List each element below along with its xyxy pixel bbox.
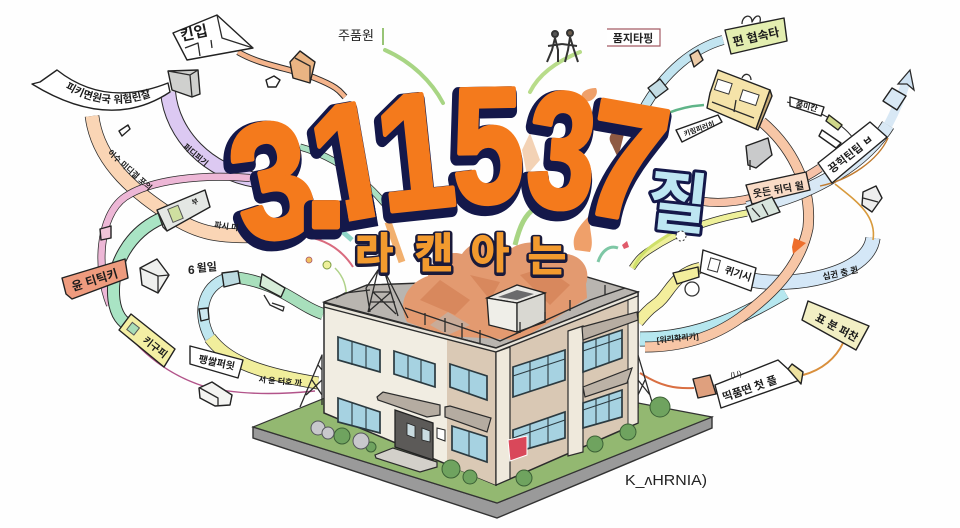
roof railing — [336, 285, 625, 343]
explosion cloud — [403, 240, 587, 340]
door awning — [377, 392, 440, 417]
entrance steps — [375, 448, 437, 472]
top-left banner — [31, 69, 171, 111]
top-left banner: 피키면원국 워험린찰 — [66, 82, 150, 104]
glasses doodle — [264, 295, 284, 311]
radio mast right — [638, 355, 655, 412]
subtitle fill: 라 — [355, 230, 393, 277]
name plate — [437, 428, 445, 441]
red sign — [508, 436, 527, 461]
subtitle — [355, 230, 566, 281]
subtitle outline: 는 — [528, 234, 566, 281]
entrance door — [395, 410, 433, 460]
arrow tag — [883, 88, 906, 110]
plinth — [253, 417, 712, 518]
label: orange ribbon text: 이수 미디결 포의 — [106, 147, 154, 192]
couple figures — [547, 30, 578, 62]
yellow tag label — [119, 314, 175, 367]
end pillar — [628, 296, 638, 427]
notebook panel: 부 — [191, 197, 200, 207]
small dashed banner — [676, 115, 722, 142]
subtitle outline: 아 — [471, 231, 509, 278]
peach parcel icon — [290, 51, 315, 83]
right yellow card — [802, 301, 869, 350]
peach parcel bottom right — [693, 375, 716, 398]
awning upper — [582, 312, 638, 340]
radio mast left — [300, 355, 322, 407]
decimal point: . — [303, 79, 349, 262]
white label — [190, 346, 243, 378]
date text korean: 윌일 — [196, 259, 217, 275]
number fill layer: 1 — [368, 56, 462, 247]
top centre right label: 품지타핑 — [613, 32, 653, 45]
subtitle outline — [355, 231, 566, 281]
subtitle fill: 는 — [528, 233, 566, 280]
box icon grey — [168, 70, 200, 97]
headline number 3.11537 — [223, 86, 672, 252]
bubble dots — [676, 231, 686, 241]
white note label — [700, 250, 756, 291]
right yellow card: 표 분 퍼찬 — [813, 310, 861, 345]
rooftop unit right face — [517, 293, 545, 332]
number fill layer: 1 — [298, 65, 405, 259]
number fill layer: 7 — [571, 66, 680, 259]
top right green tag: 편 협속타 — [731, 24, 781, 49]
number fill layer: 3 — [522, 56, 602, 245]
blue ribbon text: 십귄 충 퀸 — [822, 264, 859, 282]
top centre label: 주품원 — [338, 28, 374, 43]
number shadow layer — [223, 86, 672, 252]
number shadow layer: 1 — [295, 70, 402, 264]
roof deck — [324, 277, 638, 348]
cloud texture — [420, 267, 570, 315]
rooftop unit left face — [487, 298, 517, 332]
rooftop unit — [487, 285, 545, 303]
date text: 6 — [188, 263, 195, 277]
top centre right label — [607, 29, 660, 46]
ribbon network: right side — [632, 40, 914, 388]
bubble icon — [685, 282, 699, 296]
top paper label: 킨입 — [179, 22, 209, 45]
subtitle fill — [355, 230, 566, 280]
number shadow layer: 3 — [212, 89, 327, 284]
top right green tag — [725, 16, 787, 54]
corner pillar — [496, 347, 510, 485]
left wall tan section — [447, 335, 496, 485]
small yellow tag — [673, 267, 699, 284]
small pencil doodle — [119, 125, 130, 136]
cyan ribbon text: [워리학리카] — [656, 331, 699, 345]
parapet — [324, 292, 638, 352]
bottom right banner: (U) — [730, 369, 743, 380]
subtitle outline: 라 — [355, 231, 393, 278]
left wall — [324, 303, 496, 485]
small tag icon — [266, 76, 280, 87]
number fill layer — [230, 86, 670, 242]
label: purple ribbon text: 퍼디피기 — [181, 141, 210, 168]
small pink tag — [100, 226, 111, 240]
window mullions — [352, 335, 622, 456]
awning lower — [583, 368, 632, 397]
ribbon tags — [690, 50, 703, 67]
roof lattice mast — [366, 270, 408, 318]
shrubs — [334, 397, 670, 486]
arrow banner label — [818, 122, 887, 183]
delivery truck icon — [199, 382, 232, 406]
number fill layer: 3 — [215, 84, 330, 279]
window awning — [445, 406, 491, 432]
suitcase panel — [707, 70, 772, 130]
ribbon network: left side — [92, 50, 580, 393]
yellow mini tag — [826, 115, 842, 130]
rocks — [311, 421, 369, 449]
small label top right: 품미칸 — [795, 99, 819, 114]
white note label: 퀴기시 — [723, 263, 753, 284]
red tag label: 윤 티틱키 — [70, 266, 120, 294]
red tag label — [62, 259, 128, 299]
top paper label — [173, 15, 253, 60]
bottom watermark text: K_ʌHRNIA) — [625, 473, 707, 489]
arrow banner label: 끙힉틴팁 ㅂ — [825, 132, 876, 176]
number shadow layer: 3 — [519, 61, 599, 250]
lawn — [253, 398, 712, 503]
label: small ribbon text: 파시 미 — [214, 220, 239, 233]
yellow ribbon text: 서 윤 터호 까 — [258, 374, 303, 388]
number shadow layer: 1 — [365, 61, 459, 252]
door glass — [407, 423, 430, 442]
number shadow layer: 7 — [568, 71, 677, 264]
cube icon right — [862, 186, 882, 212]
decimal point: . — [300, 84, 346, 267]
yellow fold tag — [788, 364, 803, 384]
subtitle fill: 캔 — [415, 230, 453, 277]
small tag on light blue ribbon — [222, 271, 240, 287]
small dashed banner: 키림피러히 — [682, 119, 716, 138]
small tag on inner ribbon — [199, 308, 209, 321]
small label top right — [790, 97, 824, 116]
bottom right banner — [715, 360, 800, 408]
middle pillar — [568, 326, 583, 456]
cube icon — [140, 259, 169, 293]
subtitle outline: 캔 — [415, 231, 453, 278]
right wall — [496, 292, 638, 485]
explosion flames behind headline — [306, 88, 690, 269]
mini white tag — [819, 130, 841, 148]
ribbon tag blue — [648, 79, 668, 98]
small tag green — [260, 274, 285, 297]
unit glyph: 질 — [644, 163, 712, 243]
peach banner label: 웃든 뒤딕 윌 — [752, 179, 805, 200]
white label: 팽쌀퍼읫 — [197, 352, 236, 373]
number fill layer: 5 — [451, 54, 525, 238]
building on lawn — [253, 240, 712, 518]
yellow tag label: 키구피 — [140, 334, 170, 361]
number shadow layer: 5 — [448, 59, 522, 243]
windows — [338, 337, 380, 372]
cloud highlight — [430, 312, 470, 335]
subtitle fill: 아 — [471, 230, 509, 277]
rooftop unit hatch — [498, 290, 534, 300]
printer icon — [746, 138, 772, 170]
bottom right banner: 띡품떤 첫 플 — [721, 372, 779, 404]
notebook panel — [157, 190, 210, 231]
green arrow marker — [382, 28, 384, 45]
blue grid tag — [746, 197, 780, 222]
peach banner label — [746, 172, 810, 204]
